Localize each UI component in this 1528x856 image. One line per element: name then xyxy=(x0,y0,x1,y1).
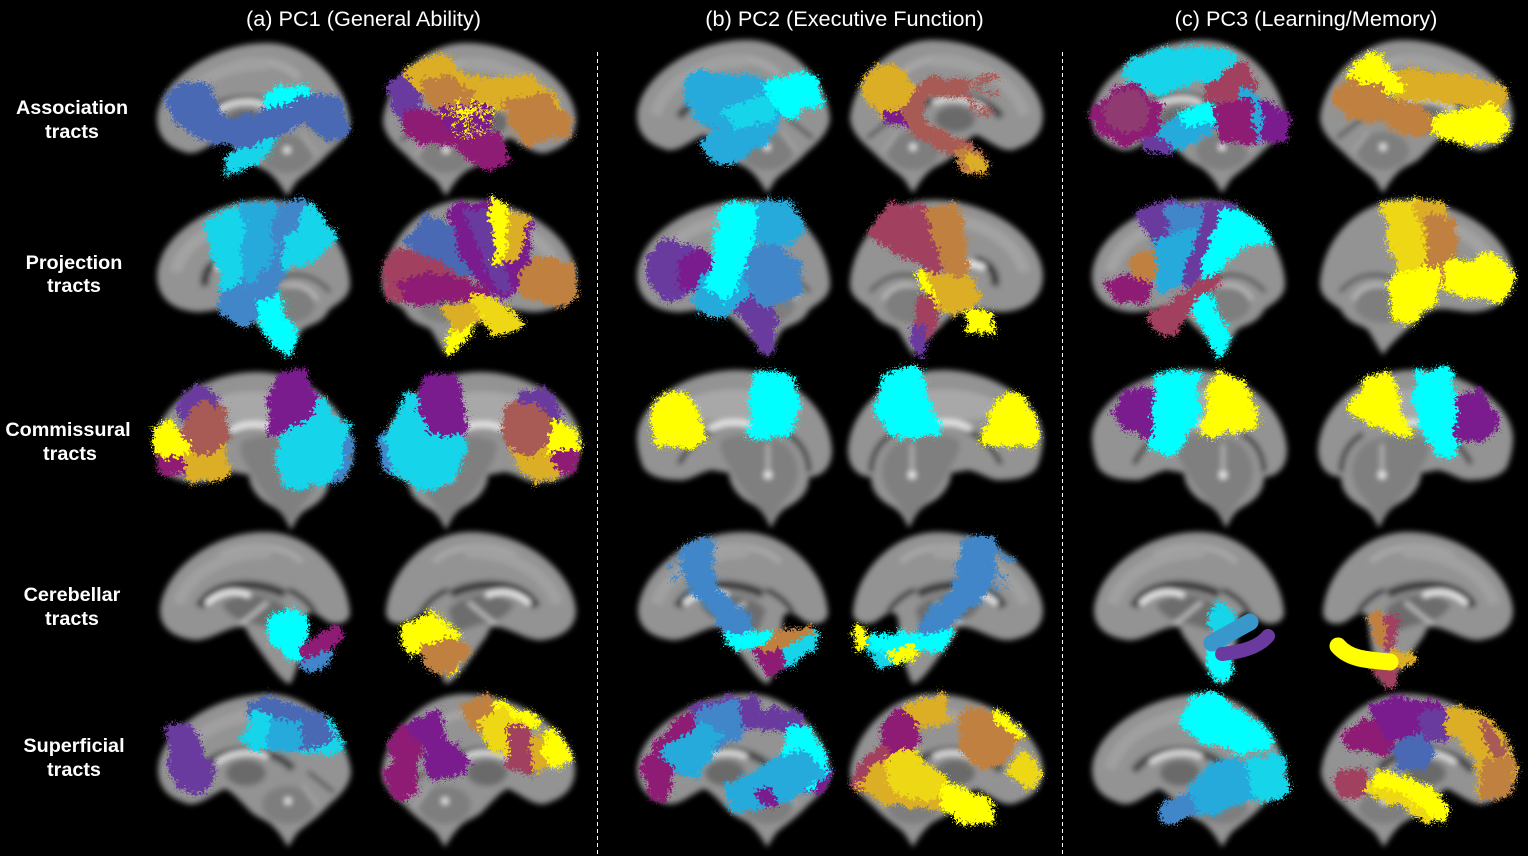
panel: cerebellar PC1 left xyxy=(160,532,350,684)
panel: cerebellar PC3 right xyxy=(1323,532,1513,685)
row label: projection: tracts xyxy=(47,275,101,297)
panel: commissural PC1 right xyxy=(381,372,580,530)
heading: PC2: (b) PC2 (Executive Function) xyxy=(705,6,984,31)
fibre bundles xyxy=(381,375,577,483)
panel: projection PC3 right xyxy=(1320,200,1513,355)
panel: cerebellar PC2 left xyxy=(638,532,828,684)
fibre bundles xyxy=(1353,375,1495,452)
heading: PC3: (c) PC3 (Learning/Memory) xyxy=(1175,6,1437,31)
panel: cerebellar PC3 left xyxy=(1094,532,1284,684)
panel: superficial PC2 left xyxy=(637,694,830,847)
fibre bundles xyxy=(395,57,568,167)
panel: association PC2 right xyxy=(850,40,1043,193)
bands xyxy=(1212,622,1268,654)
fibre bundles xyxy=(687,73,817,162)
panel: commissural PC2 left xyxy=(637,370,832,528)
fibre bundles xyxy=(389,700,567,797)
row label: association: tracts xyxy=(45,121,99,143)
fibre bundles xyxy=(159,375,351,485)
fibre bundles xyxy=(1119,373,1255,452)
row label: cerebellar: tracts xyxy=(45,608,99,630)
panel: association PC1 right xyxy=(383,43,576,196)
panel: association PC1 left xyxy=(157,43,350,196)
fibre bundles xyxy=(649,205,800,350)
row label: association: Association xyxy=(16,97,128,119)
panel: projection PC1 left xyxy=(157,200,350,355)
panel: projection PC3 left xyxy=(1092,200,1285,355)
panel: commissural PC3 left xyxy=(1092,370,1287,528)
panel: superficial PC3 left xyxy=(1092,694,1285,847)
fibre bundles xyxy=(860,538,1015,662)
row label: projection: Projection xyxy=(26,252,122,274)
panel: projection PC1 right xyxy=(383,200,576,355)
fibre bundles xyxy=(646,698,825,809)
fibre bundles xyxy=(875,207,991,352)
panel: association PC3 left xyxy=(1092,40,1285,193)
row label: commissural: Commissural xyxy=(5,419,131,441)
panel: cerebellar PC2 right xyxy=(853,532,1043,684)
fibre bundles xyxy=(386,205,573,349)
fibre bundles xyxy=(405,618,464,672)
fibre bundles xyxy=(1165,699,1282,822)
fibre bundles xyxy=(858,700,1037,819)
fibre bundles xyxy=(1336,57,1508,140)
panel: association PC2 left xyxy=(637,40,830,193)
heading: PC1: (a) PC1 (General Ability) xyxy=(246,6,481,31)
fibre bundles xyxy=(868,68,1000,169)
fibre bundles xyxy=(1370,611,1409,685)
fibre bundles xyxy=(270,612,337,666)
panel: association PC3 right xyxy=(1320,40,1513,193)
panel: superficial PC2 right xyxy=(850,694,1043,847)
panel: commissural PC2 right xyxy=(848,370,1043,528)
panel: projection PC2 left xyxy=(637,200,830,355)
fibre bundles xyxy=(172,86,344,172)
panel: projection PC2 right xyxy=(850,200,1043,355)
fibre bundles xyxy=(1098,51,1282,150)
fibre bundles xyxy=(1335,701,1511,819)
band xyxy=(1338,646,1390,662)
panel: superficial PC1 left xyxy=(158,694,351,847)
fibre bundles xyxy=(171,701,339,787)
row label: cerebellar: Cerebellar xyxy=(24,584,121,606)
panel: superficial PC1 right xyxy=(382,694,575,847)
fibre bundles xyxy=(881,373,1033,443)
row label: commissural: tracts xyxy=(43,443,97,465)
fibre bundles xyxy=(652,375,799,445)
row label: superficial: tracts xyxy=(47,759,101,781)
panel: commissural PC1 left xyxy=(157,372,352,530)
fibre bundles xyxy=(1108,205,1268,352)
fibre bundles xyxy=(211,205,331,352)
fibre bundles xyxy=(665,540,812,674)
panel: superficial PC3 right xyxy=(1321,694,1514,847)
panel: cerebellar PC1 right xyxy=(386,532,576,684)
fibre bundles xyxy=(1211,610,1232,677)
panel: commissural PC3 right xyxy=(1318,370,1513,528)
fibre bundles xyxy=(1388,204,1510,317)
row label: superficial: Superficial xyxy=(23,735,125,757)
